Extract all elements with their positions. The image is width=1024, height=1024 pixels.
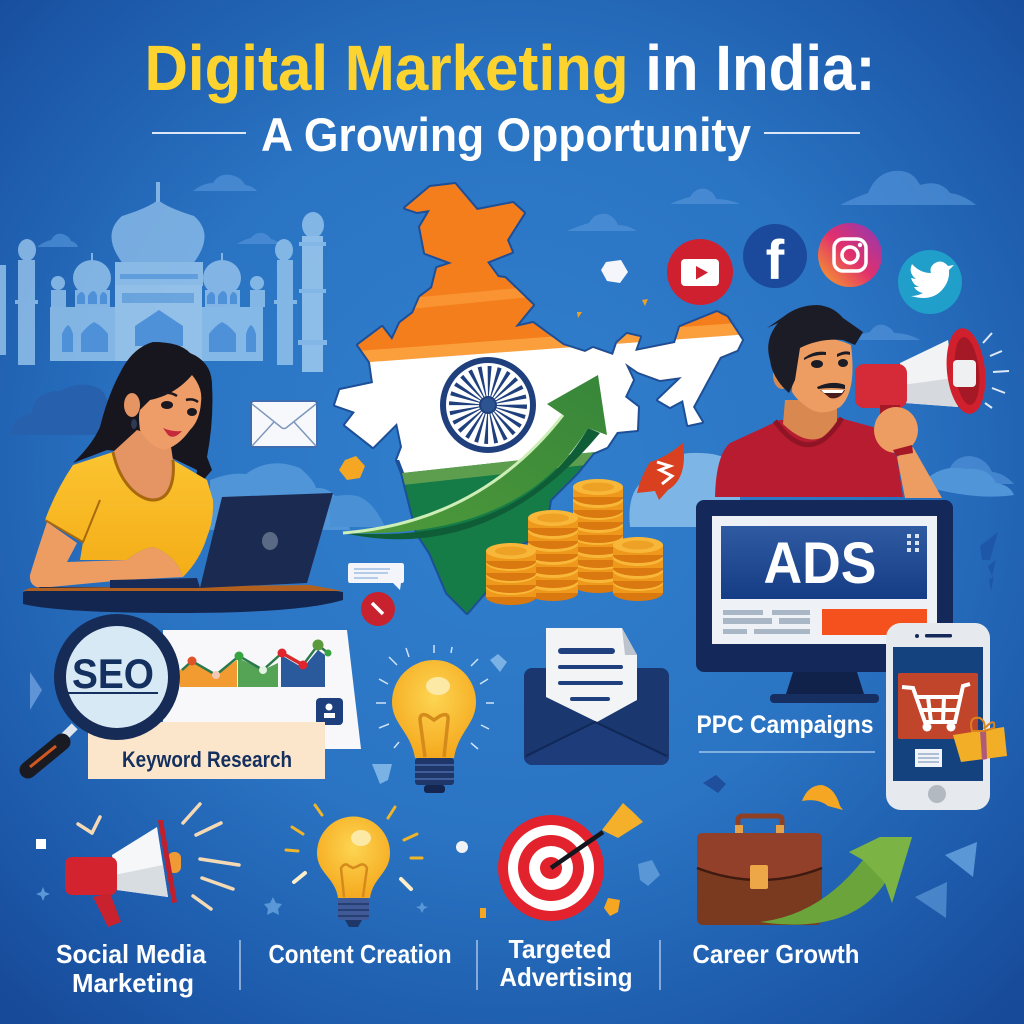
- icon: Instagram: [818, 223, 882, 287]
- social icons: [667, 223, 962, 314]
- head: [792, 338, 852, 412]
- neck and chest: [113, 430, 173, 500]
- shirt: [45, 452, 213, 577]
- title: [144, 32, 876, 161]
- briefcase with growth arrow: [697, 816, 912, 925]
- ad banner: [721, 526, 927, 599]
- ADS monitor: [696, 500, 953, 703]
- icon: red phone badge: [361, 592, 395, 626]
- scattered decorative shapes: [30, 260, 998, 918]
- label: Career Growth: Career Growth: [692, 939, 860, 969]
- coin stacks: [486, 479, 663, 605]
- torso: [715, 418, 903, 497]
- sleeve hem: [45, 500, 100, 542]
- laptop: [110, 493, 333, 588]
- map of India in tricolour: [330, 180, 750, 630]
- light clouds behind people: [210, 453, 1014, 530]
- background clouds: [37, 171, 1014, 484]
- taj arches: [62, 274, 256, 352]
- ear: [773, 361, 791, 389]
- lightbulb (centre): [376, 645, 494, 793]
- arm: [897, 447, 942, 498]
- magnifier: SEO: [72, 650, 154, 697]
- label: Targeted Advertising: Targeted: [508, 934, 612, 964]
- keyword research card: Keyword Research: [122, 747, 292, 772]
- moustache and smile: [817, 383, 845, 398]
- megaphone: [855, 326, 1009, 421]
- eyes and brows: [804, 351, 850, 368]
- label: Social Media Marketing: Marketing: [72, 968, 194, 998]
- chart card: [163, 630, 361, 749]
- label: Targeted Advertising: Advertising: [500, 962, 632, 992]
- main dome: [111, 200, 205, 265]
- neckline: [113, 452, 173, 500]
- lightbulb (content creation): [264, 805, 468, 927]
- icon: YouTube: [667, 239, 733, 305]
- title: A Growing Opportunity: [261, 108, 751, 161]
- face features: [158, 393, 198, 437]
- hair: [767, 305, 863, 393]
- neck: [783, 400, 837, 440]
- collar: [775, 418, 842, 445]
- icon: megaphone (social media marketing): [36, 804, 239, 927]
- icon: red leaf tag: [637, 443, 684, 500]
- hair: [73, 342, 212, 490]
- title: Digital Marketing in India:: [144, 32, 876, 104]
- hand: [874, 407, 918, 453]
- head: [139, 375, 201, 450]
- label: PPC Campaigns: PPC Campaigns: [696, 711, 874, 739]
- keyword research card: [88, 722, 325, 779]
- gift box: [953, 718, 1007, 762]
- watch band: [893, 445, 913, 456]
- smartphone with shopping cart: [886, 623, 1007, 810]
- ashoka chakra: [443, 360, 533, 450]
- icon: envelope: [250, 400, 318, 448]
- icon: Facebook: f: [766, 228, 785, 291]
- magnifier: [28, 620, 174, 770]
- bottom labels: [56, 934, 860, 998]
- ad banner: ADS: [764, 531, 876, 596]
- icon: chat bubble: [348, 563, 404, 590]
- green growth arrow: [343, 375, 607, 539]
- target with arrow: [498, 803, 643, 921]
- label: Social Media Marketing: Social Media: [56, 939, 207, 969]
- dark cloud behind woman: [10, 384, 112, 435]
- email envelope with letter: [524, 628, 669, 765]
- desk: [23, 587, 343, 613]
- arm: [30, 522, 183, 588]
- woman at laptop: [23, 342, 343, 613]
- label: Content Creation: Content Creation: [268, 939, 452, 969]
- cart: [902, 684, 970, 722]
- icon: Facebook: [743, 224, 807, 291]
- SEO keyword research panel: [28, 620, 361, 779]
- illustration: Taj Mahal skyline: [0, 182, 327, 372]
- man with megaphone: [715, 305, 1009, 498]
- ear and earring: [124, 393, 140, 429]
- icon: Twitter: [898, 250, 962, 314]
